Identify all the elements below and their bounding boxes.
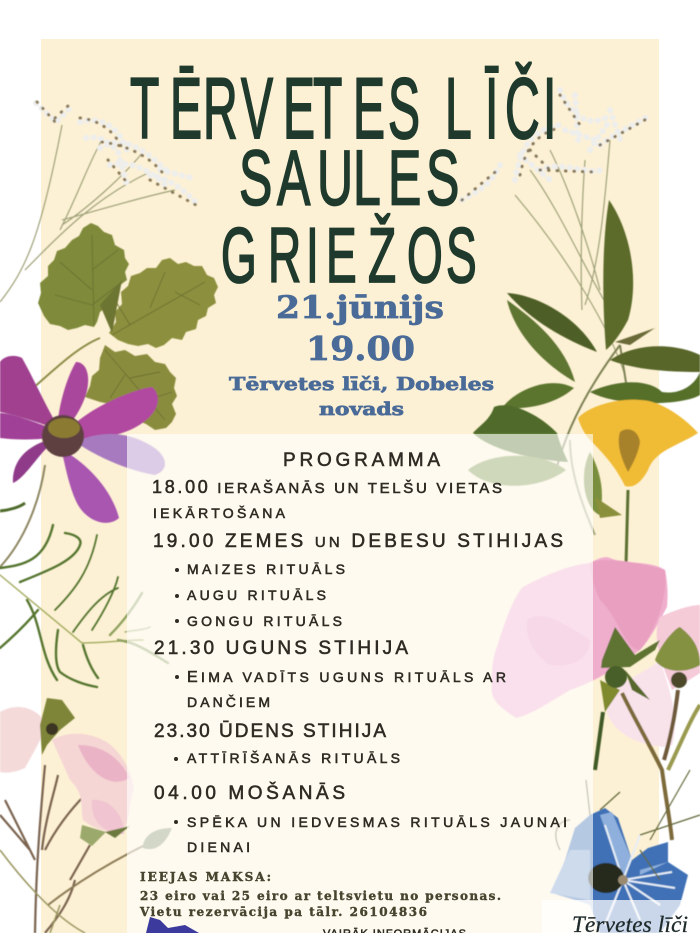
location — [229, 374, 494, 420]
translucent programme panel — [127, 434, 593, 933]
04.00 item — [154, 782, 567, 855]
19.00 item: GONGU RITUĀLS — [187, 613, 342, 629]
21.30 item: EIMA VADĪTS UGUNS RITUĀLS AR — [187, 669, 506, 686]
04.00 item: 04.00 MOŠANĀS — [154, 782, 345, 804]
programme list — [152, 450, 567, 855]
title — [130, 60, 556, 299]
programme heading: PROGRAMMA — [283, 450, 440, 471]
flower: yellow poppy — [578, 400, 698, 565]
leaves: strawberry leaves — [10, 223, 218, 430]
date: 21.jūnijs — [276, 290, 444, 326]
04.00 item: DIENAI — [187, 839, 250, 855]
stem and leaf: left edge — [0, 465, 45, 567]
entry fee: Vietu rezervācija pa tālr. 26104836 — [139, 905, 427, 919]
time: 19.00 — [306, 329, 415, 368]
23.30 item: ATTĪRĪŠANĀS RITUĀLS — [187, 750, 400, 766]
location: novads — [319, 399, 404, 420]
title line 2: SAULES — [239, 134, 459, 221]
18.00 item: 18.00 IERAŠANĀS UN TELŠU VIETAS — [152, 477, 502, 497]
flower: small blue-violet flower — [146, 917, 199, 933]
bullets — [175, 568, 179, 623]
19.00 item: AUGU RITUĀLS — [187, 587, 326, 603]
19.00 item: 19.00 ZEMES UN DEBESU STIHIJAS — [153, 531, 563, 552]
sprig: top right dried flowers — [462, 90, 650, 375]
entry fee: 23 eiro vai 25 eiro ar teltsvietu no personas. — [140, 889, 501, 903]
23.30 item: 23.30 ŪDENS STIHIJA — [154, 721, 386, 742]
21.30 item — [154, 638, 506, 710]
sprig: fern — [0, 525, 168, 687]
21.30 item: 21.30 UGUNS STIHIJA — [154, 638, 408, 659]
flower: blue nigella — [550, 770, 700, 933]
title line 3: GRIEŽOS — [221, 211, 477, 299]
stem: dark green — [595, 712, 603, 770]
title line 1: TĒRVETES LĪČI — [130, 60, 556, 156]
entry fee: IEEJAS MAKSA: — [140, 870, 271, 884]
roses: bottom left — [0, 698, 172, 933]
leaves: green willow branch — [468, 200, 700, 535]
location: Tērvetes līči, Dobeles — [229, 374, 494, 395]
sprig: top left dried flowers — [0, 102, 196, 302]
entry fee — [139, 870, 501, 919]
18.00 item — [152, 477, 502, 521]
flower: pink cosmos — [0, 356, 165, 523]
18.00 item: IEKĀRTOŠANA — [153, 505, 286, 521]
04.00 item: SPĒKA UN IEDVESMAS RITUĀLS JAUNAI — [187, 814, 567, 830]
19.00 item: MAIZES RITUĀLS — [187, 561, 345, 577]
23.30 item — [154, 721, 400, 766]
21.30 item: DANČIEM — [187, 694, 270, 710]
19.00 item — [153, 531, 563, 629]
logo box — [542, 900, 700, 933]
flower: pink rose — [492, 557, 700, 840]
